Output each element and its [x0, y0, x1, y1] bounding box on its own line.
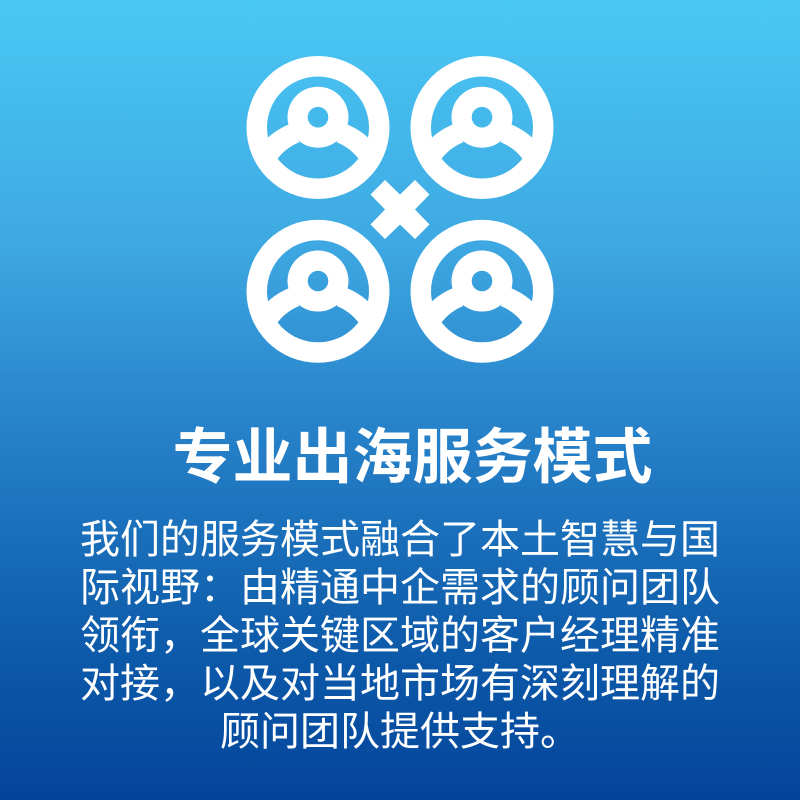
icon: person bottom right — [410, 220, 554, 363]
body text: 际视野：由精通中企需求的顾问团队 — [80, 566, 720, 610]
body text: 对接，以及对当地市场有深刻理解的 — [80, 662, 720, 706]
body text — [80, 518, 720, 754]
body text: 我们的服务模式融合了本土智慧与国 — [80, 518, 720, 562]
body text: 领衔，全球关键区域的客户经理精准 — [80, 614, 720, 658]
icon: multiply sign — [370, 180, 430, 239]
body text: 顾问团队提供支持。 — [220, 710, 580, 754]
icon: person top left — [246, 56, 390, 199]
title: 专业出海服务模式 — [172, 424, 652, 491]
icon: person top right — [410, 56, 554, 199]
icon: person bottom left — [246, 220, 390, 363]
